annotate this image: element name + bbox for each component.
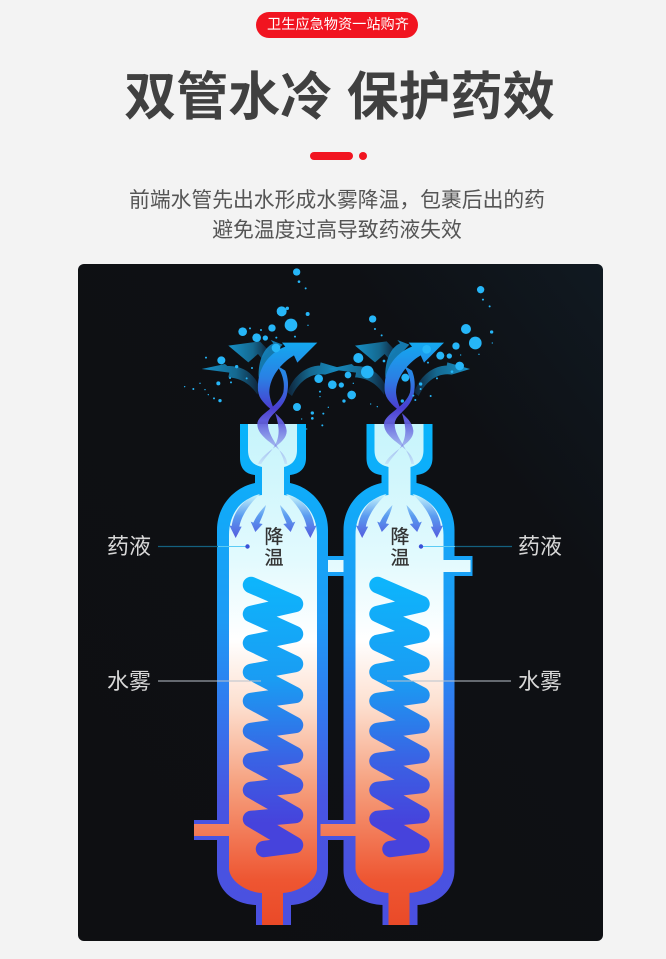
right vessel outlet pipe [444, 556, 472, 576]
callout: 药液 left: 药液 [107, 534, 151, 559]
callout: 药液 right: 药液 [518, 534, 562, 559]
title: 双管水冷 保护药效 [124, 69, 555, 127]
description text: 前端水管先出水形成水雾降温，包裹后出的药 [129, 189, 545, 212]
left vessel coil [251, 585, 295, 849]
label: 降温 left [264, 526, 284, 569]
callout: 水雾 left: 水雾 [107, 669, 151, 694]
label: 降温 right: 温 [390, 547, 410, 569]
water droplets [184, 268, 493, 430]
spray arrows, left [202, 340, 343, 464]
left vessel outlet pipe [315, 556, 344, 576]
right vessel inlet pipe [320, 820, 350, 840]
right vessel [320, 424, 472, 925]
spray arrows, right [328, 340, 470, 464]
right vessel coil [378, 585, 422, 849]
callout: 药液 right [419, 534, 562, 559]
description text [129, 189, 545, 242]
badge: 卫生应急物资一站购齐: 卫生应急物资一站购齐 [267, 17, 409, 33]
left vessel [194, 424, 344, 925]
label: 降温 left: 降 [264, 526, 284, 548]
left vessel inlet pipe [194, 820, 224, 840]
callout: 水雾 right: 水雾 [518, 669, 562, 694]
description text: 避免温度过高导致药液失效 [212, 219, 462, 242]
cooling down arrows, right [356, 494, 443, 538]
cooling down arrows, left [229, 494, 317, 538]
badge: 卫生应急物资一站购齐 [256, 12, 418, 38]
label: 降温 right: 降 [390, 526, 410, 548]
callout: 药液 left [107, 534, 250, 559]
label: 降温 right [390, 526, 410, 569]
label: 降温 left: 温 [264, 547, 284, 569]
red accent dash and dot [310, 152, 367, 160]
